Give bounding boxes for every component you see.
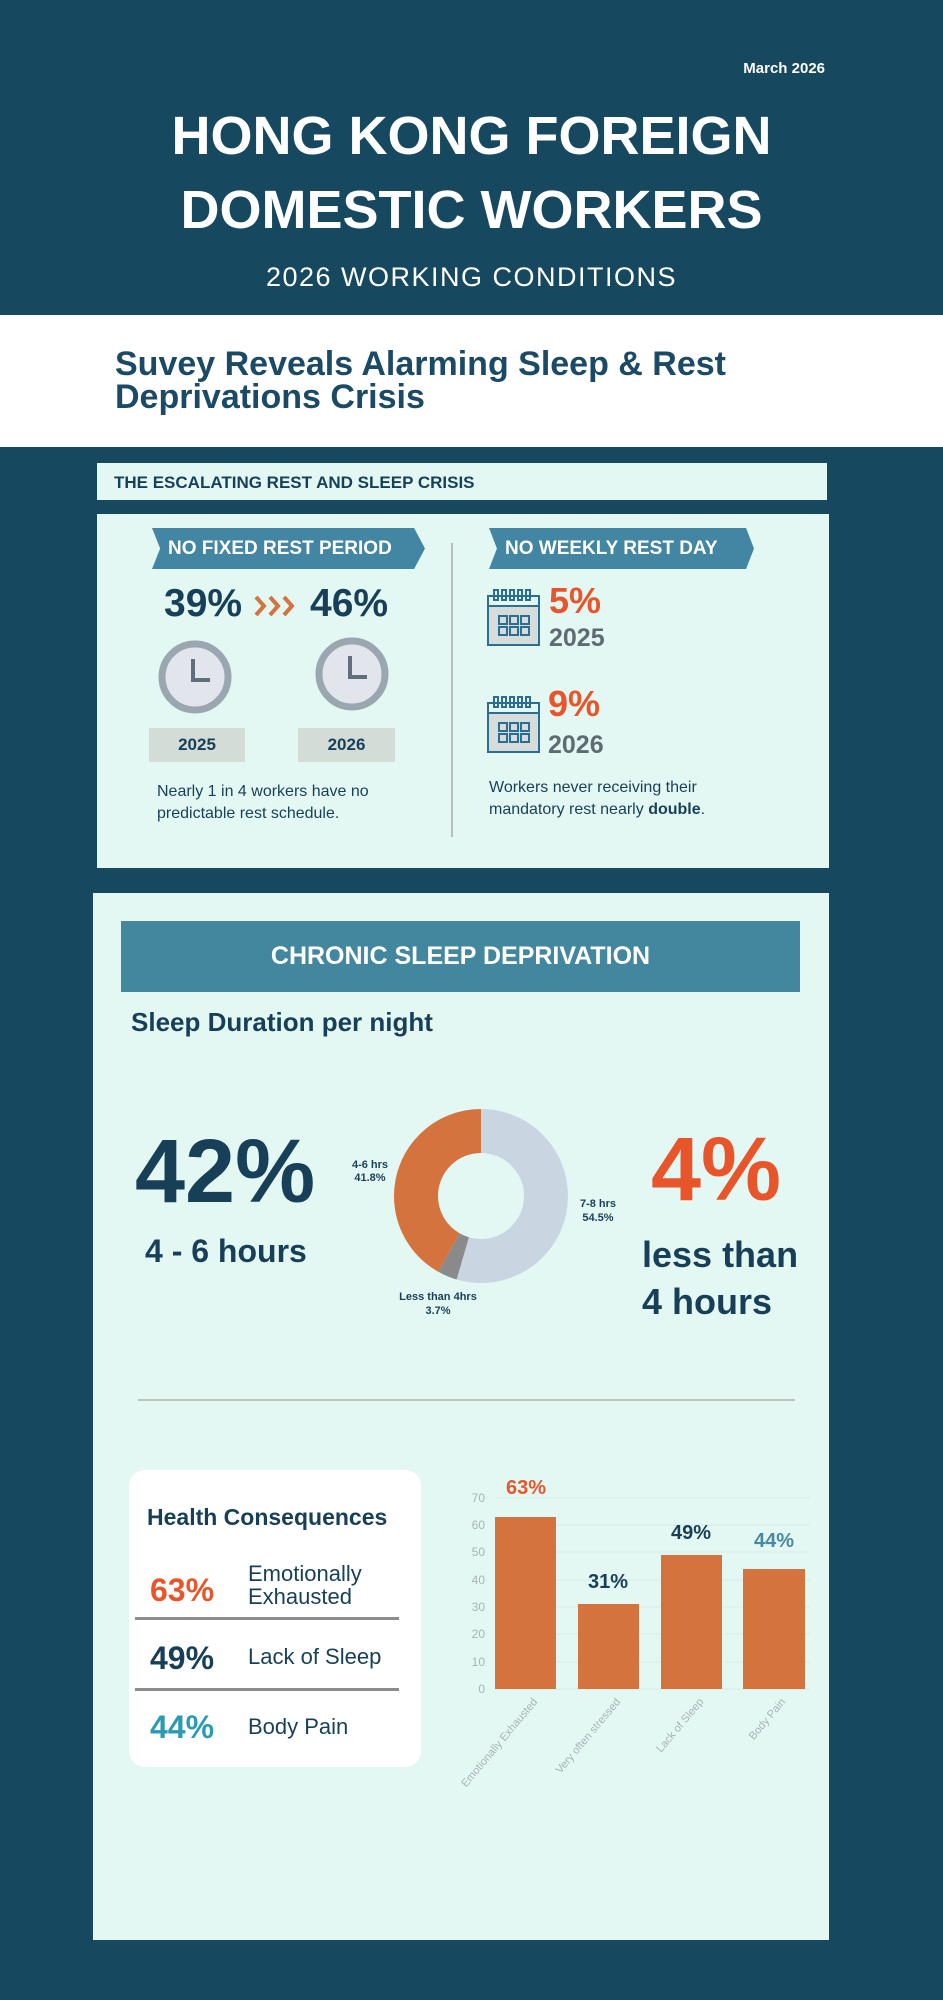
row 44% xyxy=(150,1709,348,1745)
caption right: mandatory rest nearly double. xyxy=(489,801,705,818)
date: March 2026 xyxy=(743,60,825,77)
stat 42% xyxy=(135,1122,315,1269)
row 49%: 49% xyxy=(150,1640,214,1676)
stat 5% 2025 xyxy=(549,580,605,652)
row 49%: Lack of Sleep xyxy=(248,1644,381,1669)
bar chart: 0 xyxy=(478,1682,485,1696)
bar chart: Very often stressed xyxy=(554,1696,623,1776)
donut chart: 3.7% xyxy=(425,1305,451,1317)
caption left: predictable rest schedule. xyxy=(157,805,339,822)
caption right xyxy=(489,779,705,818)
stat 9% 2026: 9% xyxy=(548,683,600,724)
stat 39 to 46: 39% xyxy=(164,582,242,625)
stat 39 to 46 xyxy=(164,582,388,625)
caption left xyxy=(157,783,369,822)
bar chart: 31% xyxy=(588,1571,628,1593)
bar chart: Emotionally Exhausted xyxy=(460,1696,540,1790)
ribbon: no weekly rest xyxy=(489,528,754,569)
stat 9% 2026 xyxy=(548,683,604,759)
icon: clock 2026 xyxy=(316,638,388,710)
bar chart: 10 xyxy=(472,1655,485,1669)
donut chart: 41.8% xyxy=(354,1172,386,1184)
stat 39 to 46: 46% xyxy=(310,582,388,625)
bar chart: 20 xyxy=(472,1627,485,1641)
stat 42%: 42% xyxy=(135,1122,315,1222)
bar chart: 63% xyxy=(506,1477,546,1499)
row 44%: Body Pain xyxy=(248,1714,348,1739)
donut chart: 4-6 hrs xyxy=(352,1159,388,1171)
donut chart xyxy=(352,1109,616,1317)
ribbon: no fixed rest: NO FIXED REST PERIOD xyxy=(168,538,392,559)
stat 4% xyxy=(642,1120,798,1322)
bar chart xyxy=(460,1477,810,1790)
bar chart: Body Pain xyxy=(747,1696,788,1742)
year 2025 xyxy=(149,728,245,762)
stat 42%: 4 - 6 hours xyxy=(145,1233,307,1269)
bar chart: 44% xyxy=(754,1530,794,1552)
section label xyxy=(97,463,827,500)
bar chart: 30 xyxy=(472,1600,485,1614)
card: health consequences: Health Consequences xyxy=(147,1504,387,1530)
subtitle: 2026 WORKING CONDITIONS xyxy=(266,262,677,292)
icon: clock 2025 xyxy=(158,640,232,714)
year 2026 xyxy=(298,728,395,762)
caption right: Workers never receiving their xyxy=(489,779,697,796)
year 2026: 2026 xyxy=(328,735,365,754)
bar chart: 50 xyxy=(472,1545,485,1559)
row 63%: 63% xyxy=(150,1572,214,1608)
stat 5% 2025: 2025 xyxy=(549,624,605,652)
bar chart: 60 xyxy=(472,1518,485,1532)
bar chart: 40 xyxy=(472,1573,485,1587)
section label: THE ESCALATING REST AND SLEEP CRISIS xyxy=(114,473,475,492)
icon: calendar 2025 xyxy=(487,589,540,646)
stat 9% 2026: 2026 xyxy=(548,731,604,759)
row 44%: 44% xyxy=(150,1709,214,1745)
row 63%: Emotionally xyxy=(248,1561,362,1586)
subheading band: Suvey Reveals Alarming Sleep & Rest xyxy=(115,345,726,383)
stat 4%: less than xyxy=(642,1234,798,1275)
row 49% xyxy=(135,1623,399,1691)
panel: rest crisis xyxy=(97,514,829,868)
row 63%: Exhausted xyxy=(248,1584,352,1609)
subheading band: Deprivations Crisis xyxy=(115,378,425,416)
panel: sleep deprivation xyxy=(93,893,829,1940)
stat 5% 2025: 5% xyxy=(549,580,601,621)
section header: CHRONIC SLEEP DEPRIVATION xyxy=(271,942,650,970)
year 2025: 2025 xyxy=(178,735,216,754)
ribbon: no fixed rest xyxy=(152,528,425,569)
row 63% xyxy=(135,1560,399,1620)
icon: calendar 2026 xyxy=(487,696,540,753)
donut chart: Less than 4hrs xyxy=(399,1291,477,1303)
caption left: Nearly 1 in 4 workers have no xyxy=(157,783,369,800)
chart title: Sleep Duration per night xyxy=(131,1007,433,1037)
subheading band xyxy=(0,315,943,447)
ribbon: no weekly rest: NO WEEKLY REST DAY xyxy=(505,538,718,559)
bar chart: 49% xyxy=(671,1522,711,1544)
stat 4%: 4% xyxy=(651,1120,781,1220)
donut chart: 7-8 hrs xyxy=(580,1198,616,1210)
section header xyxy=(121,921,800,992)
card: health consequences xyxy=(129,1470,421,1767)
donut chart: 54.5% xyxy=(582,1212,614,1224)
title: HONG KONG FOREIGN xyxy=(171,106,772,166)
title xyxy=(171,106,772,240)
panel: sleep deprivation: 4 hours xyxy=(642,1281,772,1322)
header xyxy=(0,0,943,315)
bar chart: Lack of Sleep xyxy=(654,1696,706,1755)
bar chart: 70 xyxy=(472,1491,485,1505)
title: DOMESTIC WORKERS xyxy=(180,180,762,240)
